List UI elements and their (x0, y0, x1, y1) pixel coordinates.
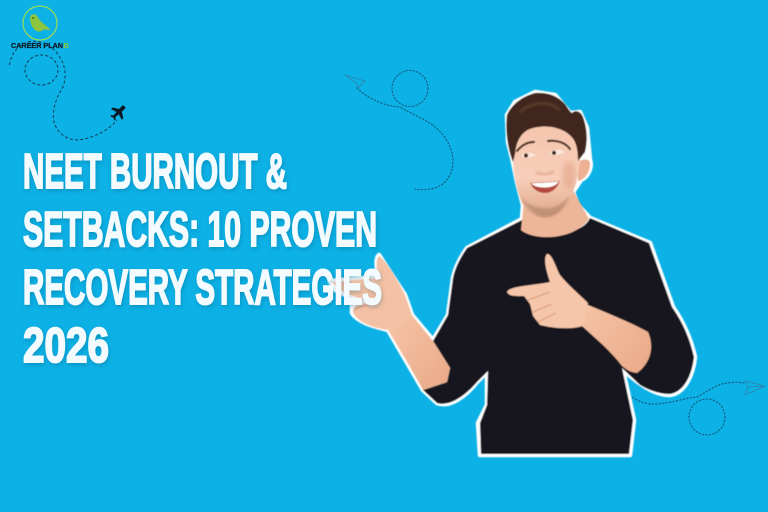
icon: paper plane (345, 75, 365, 88)
logo: Career Plan: CAREER PLAN (11, 41, 63, 50)
ear (578, 159, 590, 181)
nose shadow (536, 171, 554, 174)
eyes (521, 150, 565, 158)
stubble (520, 196, 570, 217)
hair (506, 93, 587, 162)
face (513, 118, 580, 218)
title: RECOVERY STRATEGIES (23, 260, 382, 315)
white sticker outline (330, 92, 695, 455)
left hand (332, 256, 412, 330)
logo: Career Plan (11, 6, 69, 50)
left forearm (388, 315, 450, 390)
title (23, 144, 382, 373)
title: 2026 (23, 318, 109, 373)
dashed flight path with airplane (10, 41, 126, 140)
hair highlights (520, 103, 560, 112)
right forearm (582, 303, 651, 373)
logo: Career Plan: B (64, 41, 69, 50)
cheek blush (562, 161, 576, 189)
icon: airplane (110, 105, 126, 121)
dotted flight path with paper plane, top (345, 70, 453, 190)
icon: paper plane (745, 381, 765, 395)
mouth (530, 181, 560, 193)
sweater (423, 218, 694, 454)
neck (521, 190, 589, 237)
title: SETBACKS: 10 PROVEN (23, 202, 377, 257)
pointing hand (507, 254, 588, 328)
eyebrows (517, 141, 570, 151)
title: NEET BURNOUT & (23, 144, 287, 199)
person cutout (330, 92, 695, 455)
dotted flight path with paper plane, bottom right (627, 381, 765, 435)
